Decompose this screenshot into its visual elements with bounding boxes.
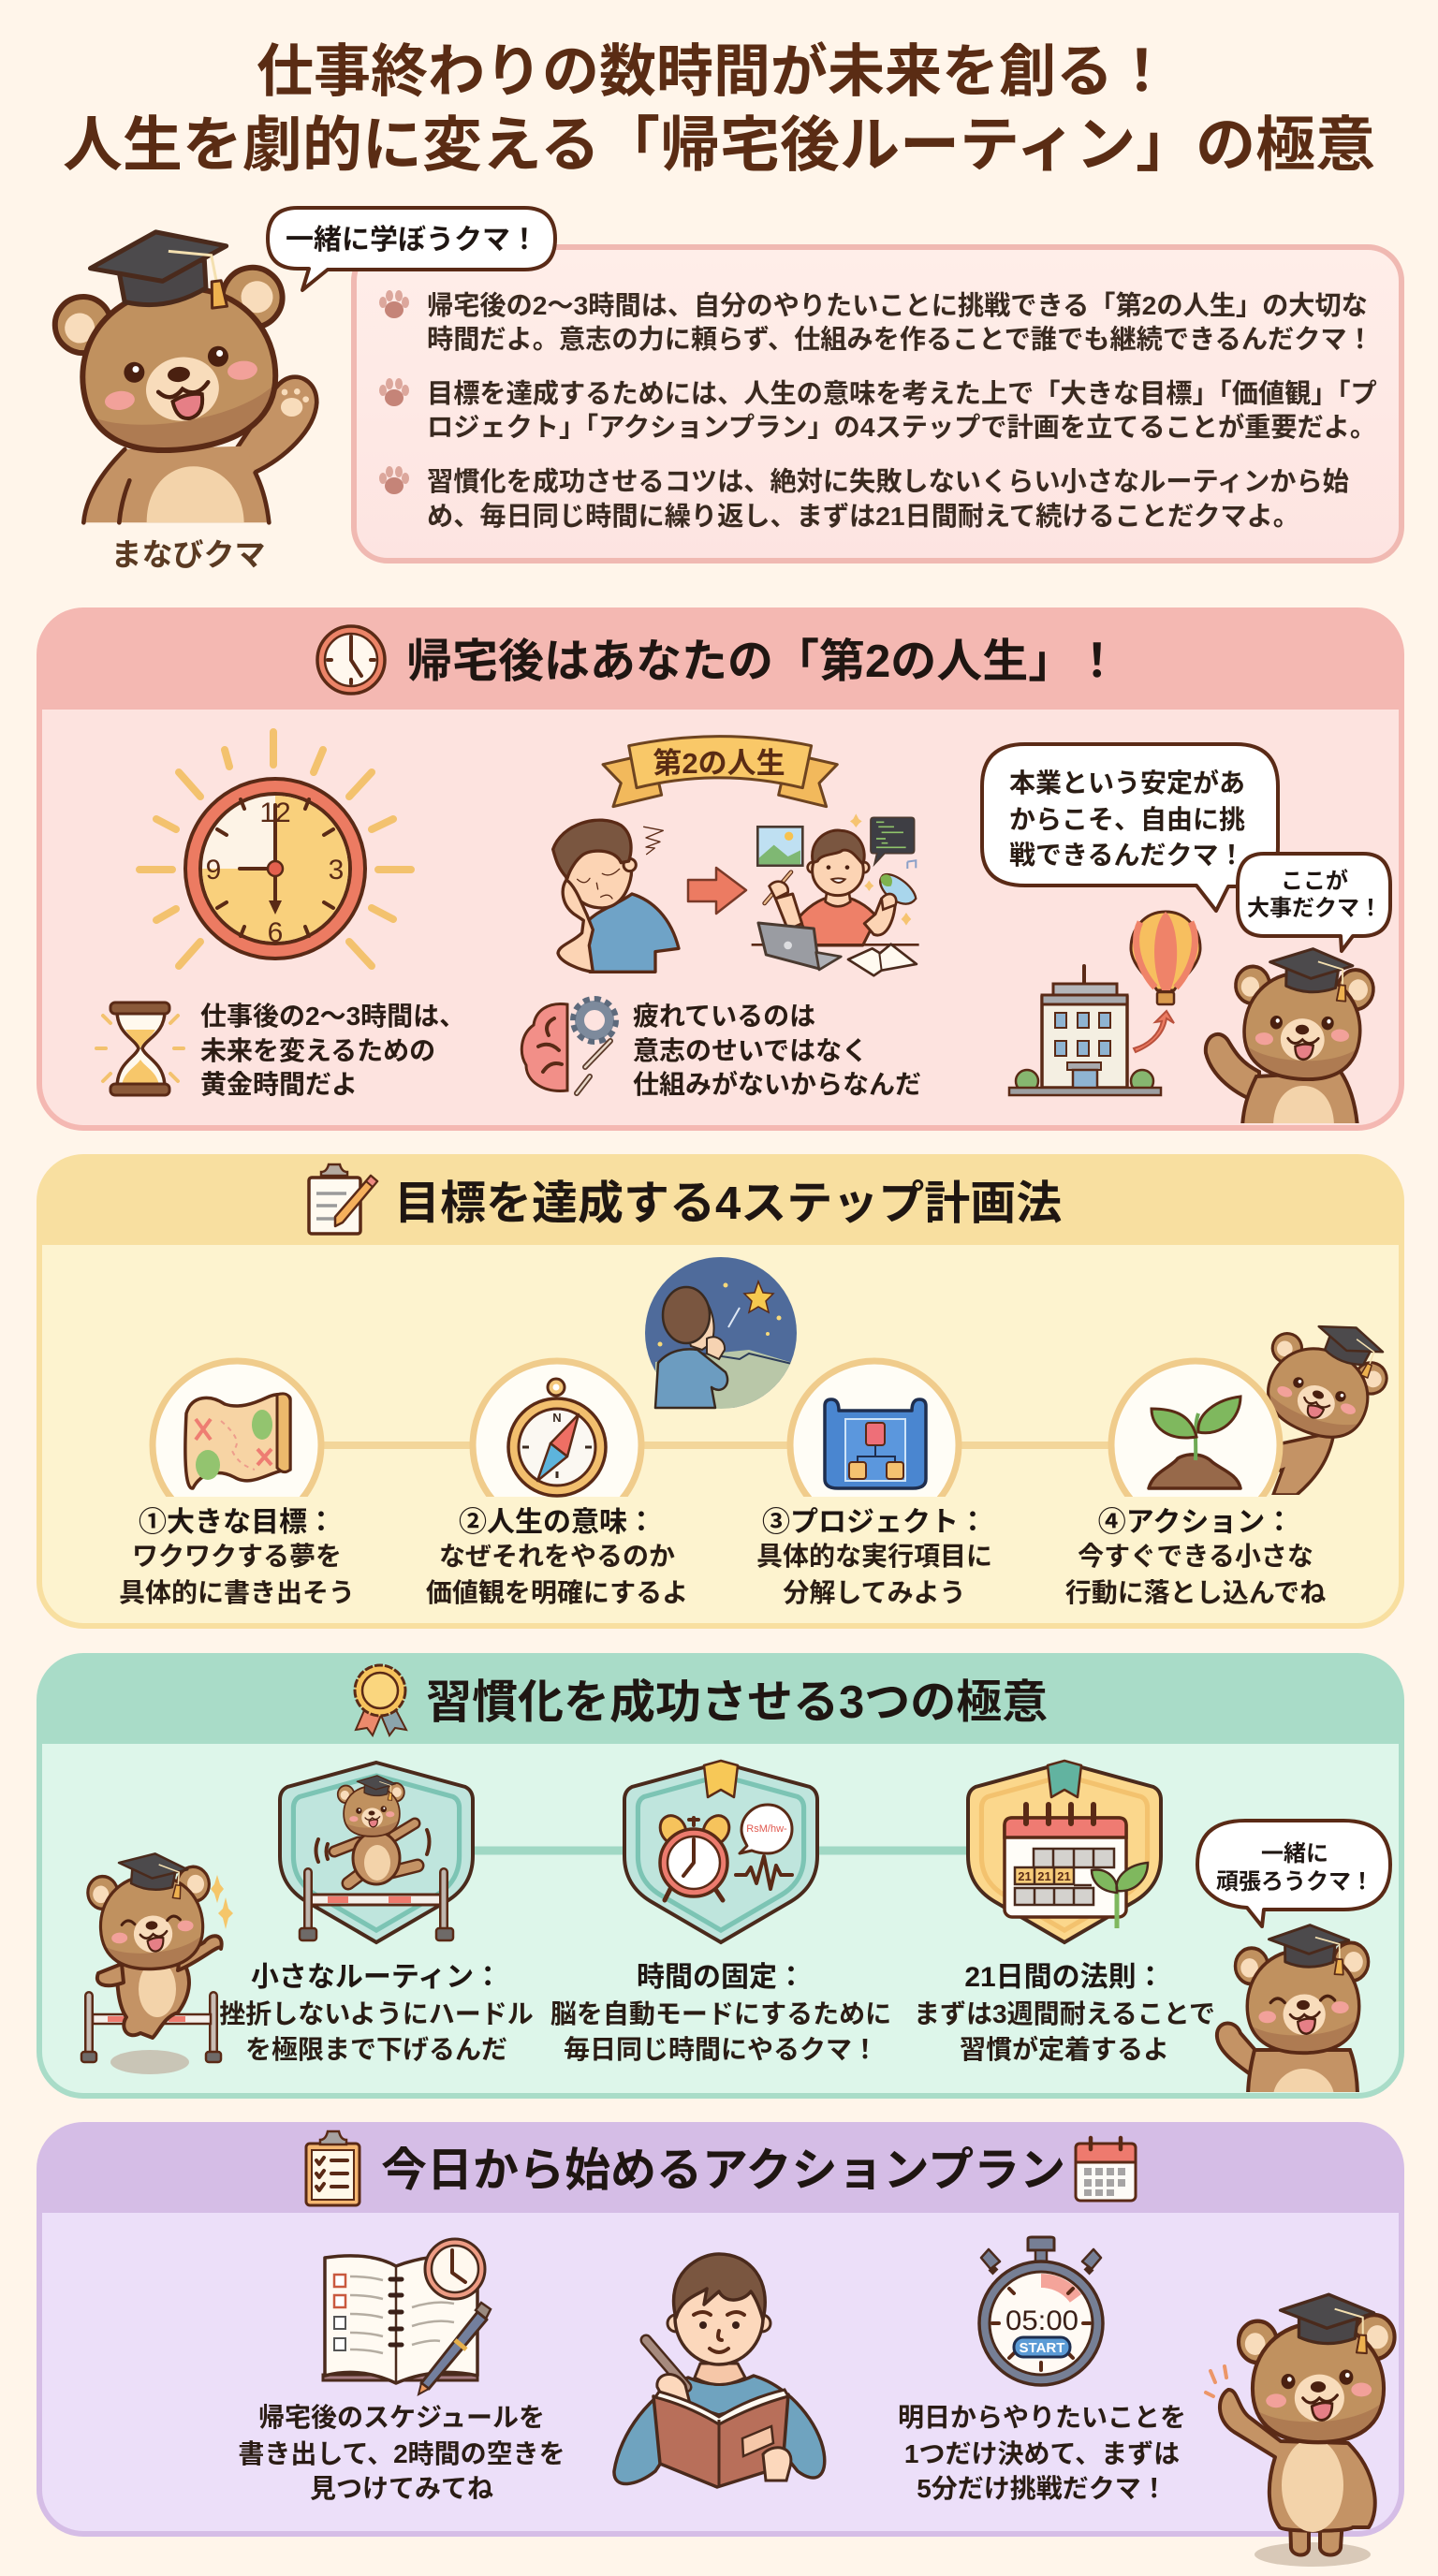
text: fixed time	[550, 1962, 891, 2064]
icon: sunburst wall clock: 12	[259, 798, 291, 828]
text: schedule step: 帰宅後のスケジュールを	[258, 2403, 545, 2432]
badge: 21 day rule shield: 21	[1018, 1869, 1032, 1883]
text: five minute step: 5分だけ挑戦だクマ！	[917, 2474, 1167, 2503]
text: step 1 description: ①大きな目標：	[139, 1507, 335, 1538]
illustration: person gazing at star	[645, 1257, 805, 1417]
badge: small routine shield	[280, 1763, 473, 1942]
title: 人生を劇的に変える「帰宅後ルーティン」の極意	[63, 111, 1375, 179]
text: step 1 description: ワクワクする夢を	[132, 1542, 342, 1571]
mascot: manabi bear with cap	[51, 224, 316, 522]
badge: 21 day rule shield: 21	[1037, 1869, 1051, 1883]
text: intro paragraph 2: ロジェクト」「アクションプラン」の4ステップで計画を立てることが重要だよ。	[427, 412, 1376, 442]
icon: paw bullet 1	[379, 290, 409, 318]
text: five minute step	[898, 2403, 1186, 2503]
speech bubble: let's try together: 一緒に	[1261, 1841, 1328, 1866]
illustration: office building and balloon	[1009, 912, 1200, 1095]
text: 21 day rule: まずは3週間耐えることで	[914, 1999, 1215, 2028]
speech bubble: this is important: 大事だクマ！	[1247, 896, 1382, 921]
text: step 3 description: 具体的な実行項目に	[756, 1542, 992, 1571]
illustration: energized man with creative hobbies	[752, 813, 919, 975]
speech bubble: let's try together	[1197, 1821, 1390, 1926]
speech bubble: let's learn	[268, 208, 555, 290]
speech bubble: this is important: ここが	[1281, 868, 1348, 894]
text: schedule step: 見つけてみてね	[310, 2474, 493, 2503]
text: intro paragraph 1: 時間だよ。意志の力に頼らず、仕組みを作ることで誰でも継続できるんだクマ！	[427, 324, 1373, 354]
icon: sunburst wall clock: 3	[329, 855, 344, 886]
badge: fixed time shield	[624, 1761, 817, 1942]
text: step 2 description: なぜそれをやるのか	[439, 1542, 675, 1571]
speech bubble: this is important	[1238, 854, 1390, 951]
heading: action plan: 今日から始めるアクションプラン	[381, 2145, 1065, 2196]
icon: brain with gear and broken chain	[521, 999, 616, 1093]
icon: sunburst wall clock	[139, 732, 411, 966]
text: step 3 description	[756, 1507, 992, 1607]
text: fixed time: 脳を自動モードにするために	[550, 1999, 891, 2028]
text: small routine: を極限まで下げるんだ	[245, 2035, 507, 2064]
icon: sunburst wall clock: 6	[268, 917, 283, 948]
text: intro paragraph 1: 帰宅後の2〜3時間は、自分のやりたいことに挑戦できる「第2の人生」の大切な	[427, 290, 1368, 320]
connector line: steps	[237, 1442, 1196, 1449]
icon: sunburst wall clock: 9	[206, 855, 221, 886]
text: schedule step: 書き出して、2時間の空きを	[238, 2439, 565, 2468]
step 2: life meaning compass	[470, 1357, 644, 1498]
text: five minute step: 1つだけ決めて、まずは	[904, 2439, 1180, 2468]
text: step 2 description: ②人生の意味：	[459, 1507, 655, 1538]
text: 21 day rule	[914, 1962, 1215, 2064]
text: small routine	[219, 1962, 534, 2064]
label: bear name: まなびクマ	[110, 537, 266, 572]
text: 21 day rule: 習慣が定着するよ	[960, 2034, 1169, 2064]
icon: hourglass	[96, 1003, 183, 1095]
mascot: jumping bear over hurdle	[81, 1849, 233, 2074]
icon: heading checklist clipboard	[306, 2131, 360, 2205]
icon: heading medal	[355, 1665, 406, 1735]
illustration: person writing in book	[614, 2254, 825, 2487]
icon: second life ribbon banner	[603, 737, 837, 807]
text: step 2 description	[426, 1507, 688, 1607]
icon: paw bullet 2	[379, 378, 409, 406]
text: fixed time: 時間の固定：	[637, 1962, 805, 1993]
mascot: cheering bear	[1217, 1923, 1369, 2097]
text: step 4 description	[1065, 1507, 1326, 1607]
text: intro paragraph 3: め、毎日同じ時間に繰り返し、まずは21日間耐えて続けることだクマよ。	[427, 501, 1299, 531]
illustration: five minute stopwatch: START	[1020, 2340, 1064, 2356]
step 4: action sprout	[1108, 1357, 1283, 1497]
text: golden time	[200, 1002, 465, 1099]
connector line: shields	[376, 1846, 1064, 1855]
heading: habit secrets: 習慣化を成功させる3つの極意	[426, 1677, 1048, 1728]
panel: action plan section	[37, 2122, 1404, 2537]
text: golden time: 黄金時間だよ	[200, 1070, 358, 1099]
badge: fixed time shield: RsM/hw-	[746, 1823, 787, 1835]
text: golden time: 仕事後の2〜3時間は、	[200, 1002, 465, 1031]
text: small routine: 挫折しないようにハードル	[219, 1999, 534, 2028]
text: fixed time: 毎日同じ時間にやるクマ！	[564, 2035, 878, 2064]
text: step 1 description: 具体的に書き出そう	[119, 1578, 355, 1607]
text: not willpower: 疲れているのは	[633, 1002, 815, 1031]
speech bubble: stability allows freedom: からこそ、自由に挑	[1009, 805, 1245, 834]
text: five minute step: 明日からやりたいことを	[898, 2403, 1186, 2432]
text: not willpower: 仕組みがないからなんだ	[633, 1069, 921, 1099]
illustration: notebook with clock and pen	[323, 2239, 491, 2394]
heading: second life: 帰宅後はあなたの「第2の人生」！	[406, 637, 1120, 687]
text: step 2 description: 価値観を明確にするよ	[426, 1578, 688, 1607]
mascot: pointing bear	[1206, 2291, 1395, 2567]
panel: introduction summary	[354, 247, 1401, 561]
text: step 3 description: ③プロジェクト：	[762, 1507, 987, 1538]
illustration: five minute stopwatch: 05:00	[1005, 2305, 1078, 2336]
panel: four-step planning section	[37, 1154, 1404, 1629]
icon: heading clipboard and pencil	[309, 1164, 377, 1234]
panel: three habit secrets section	[37, 1653, 1404, 2099]
text: step 4 description: 行動に落とし込んでね	[1065, 1578, 1326, 1607]
text: golden time: 未来を変えるための	[200, 1036, 435, 1065]
text: not willpower	[633, 1002, 921, 1099]
step 2: life meaning compass: N	[552, 1411, 562, 1425]
speech bubble: let's try together: 頑張ろうクマ！	[1216, 1869, 1373, 1895]
text: intro paragraph 2	[427, 378, 1377, 442]
text: intro paragraph 3: 習慣化を成功させるコツは、絶対に失敗しないくらい小さなルーティンから始	[427, 466, 1349, 496]
speech bubble: stability allows freedom: 本業という安定があ	[1009, 768, 1245, 798]
title	[63, 39, 1375, 179]
mascot: waving bear	[1206, 945, 1375, 1127]
text: step 1 description	[119, 1507, 355, 1607]
text: intro paragraph 1	[427, 290, 1373, 354]
step 1: big goal map	[150, 1357, 324, 1497]
text: not willpower: 意志のせいではなく	[633, 1036, 868, 1065]
icon: heading clock	[317, 626, 385, 694]
icon: paw bullet 3	[379, 466, 409, 494]
icon: heading calendar	[1076, 2138, 1136, 2201]
speech bubble: stability allows freedom: 戦できるんだクマ！	[1009, 841, 1244, 870]
icon: second life ribbon banner: 第2の人生	[653, 747, 785, 780]
heading: four-step plan: 目標を達成する4ステップ計画法	[394, 1178, 1062, 1229]
title: 仕事終わりの数時間が未来を創る！	[257, 39, 1170, 103]
text: schedule step	[238, 2403, 565, 2503]
step 3: project blueprint	[786, 1357, 962, 1497]
speech bubble: let's learn: 一緒に学ぼうクマ！	[286, 225, 538, 256]
badge: 21 day rule shield: 21	[1057, 1869, 1071, 1883]
illustration: tired man	[553, 820, 679, 972]
text: intro paragraph 3	[427, 466, 1349, 531]
arrow: tired to energized	[688, 868, 746, 914]
text: step 4 description: ④アクション：	[1098, 1507, 1293, 1538]
text: small routine: 小さなルーティン：	[251, 1962, 502, 1993]
text: intro paragraph 2: 目標を達成するためには、人生の意味を考えた上で「大きな目標」「価値観」「プ	[427, 378, 1377, 408]
text: step 3 description: 分解してみよう	[783, 1578, 966, 1607]
mascot: peeking bear	[1266, 1325, 1388, 1495]
text: 21 day rule: 21日間の法則：	[964, 1962, 1165, 1993]
illustration: five minute stopwatch	[979, 2237, 1103, 2385]
panel: second life section	[37, 607, 1404, 1131]
speech bubble: stability allows freedom	[982, 744, 1278, 911]
badge: 21 day rule shield	[968, 1761, 1161, 1942]
text: step 4 description: 今すぐできる小さな	[1078, 1542, 1313, 1571]
